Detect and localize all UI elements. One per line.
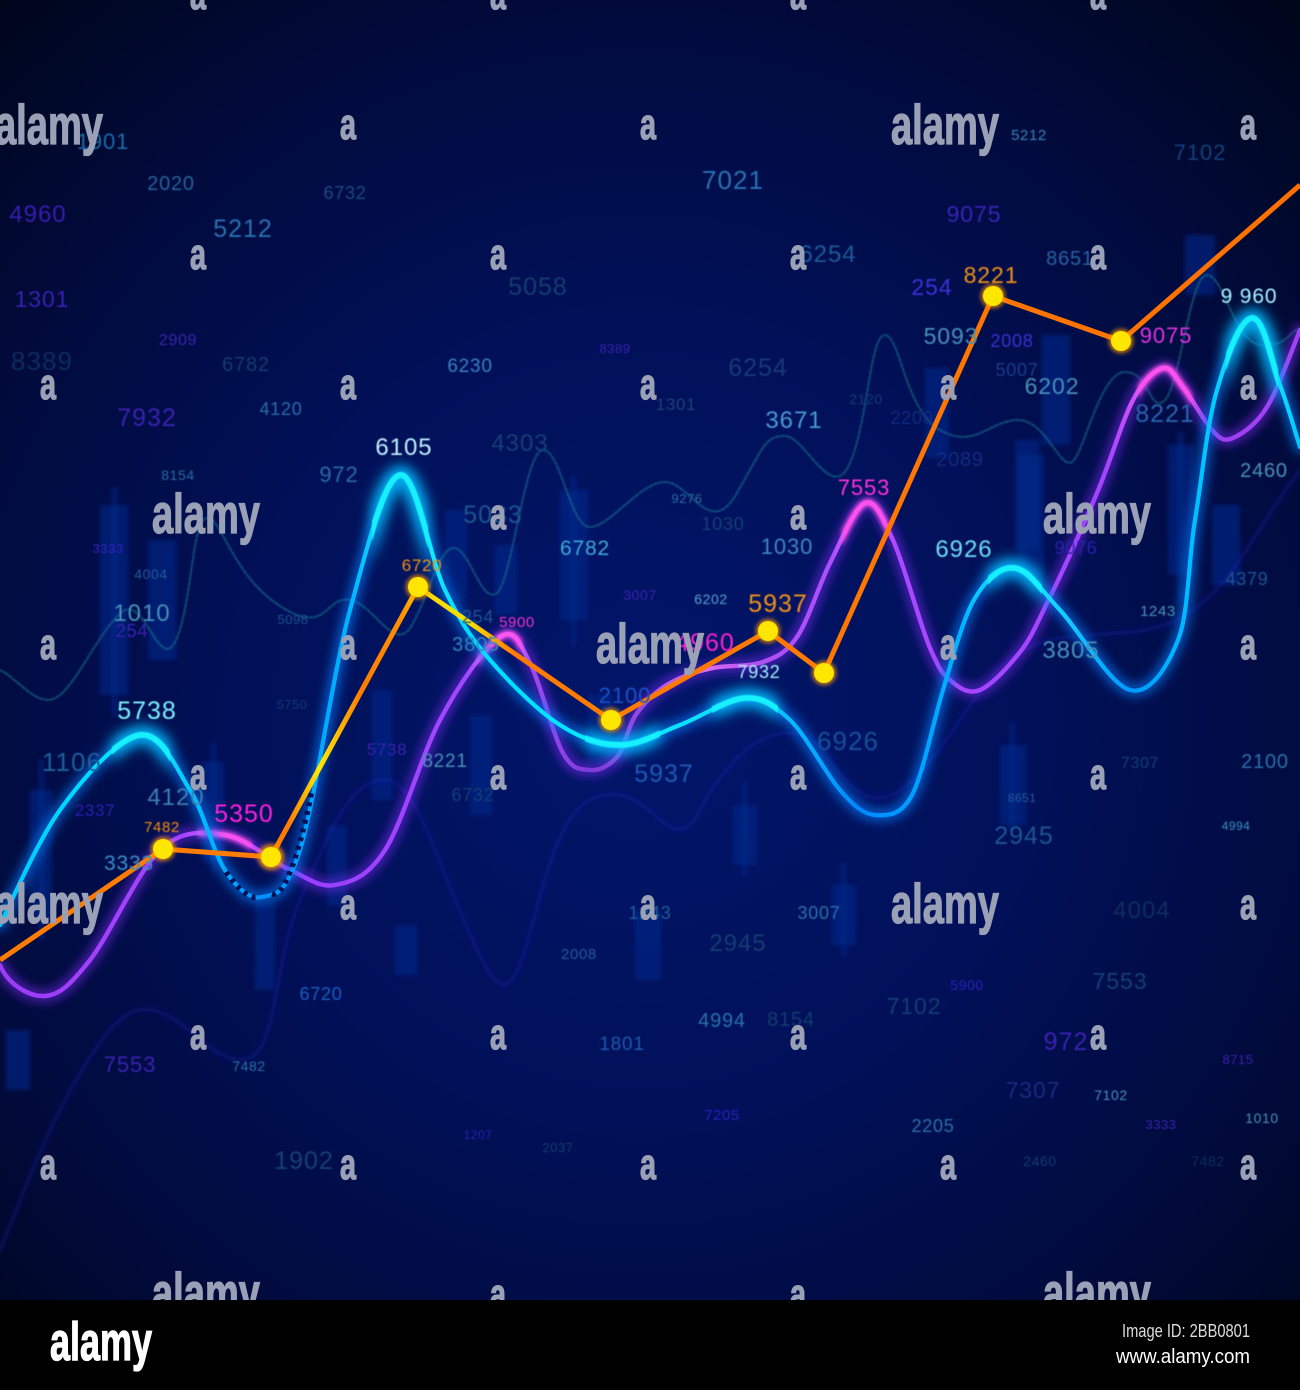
watermark: alamy logos and letters: a (1090, 230, 1106, 279)
image id: Image ID: 2BB0801 (1122, 1321, 1250, 1341)
watermark: alamy logos and letters: a (1090, 750, 1106, 799)
watermark: alamy logos and letters: a (640, 360, 656, 409)
watermark: alamy logos and letters: a (940, 620, 956, 669)
data number labels: 7553 (838, 475, 890, 500)
watermark: alamy logos and letters: a (490, 1270, 506, 1319)
data number labels: 2200 (891, 408, 933, 428)
data number labels: 7307 (1121, 755, 1159, 772)
watermark: alamy logos and letters: a (40, 620, 56, 669)
data number labels: 8389 (11, 346, 73, 376)
data number labels: 7102 (887, 993, 941, 1019)
data number labels: 2100 (599, 683, 651, 708)
data number labels: 6105 (375, 434, 433, 461)
data number labels: 2909 (159, 332, 197, 349)
data number labels: 6926 (817, 726, 879, 756)
watermark: alamy logos and letters: alamy (891, 93, 999, 156)
data number labels: 3333 (104, 852, 154, 875)
data number labels: 2945 (709, 930, 767, 957)
data number labels: 9 960 (1221, 285, 1277, 308)
data number labels: 6732 (324, 183, 366, 203)
data number labels: 7482 (1191, 1153, 1225, 1169)
watermark: alamy logos and letters: a (640, 1140, 656, 1189)
data number labels: 3671 (765, 407, 823, 434)
data number labels: 9076 (1055, 538, 1097, 558)
chart line: cyan curve (0, 318, 1300, 925)
data number labels: 5900 (950, 977, 984, 993)
data number labels: 2100 (1241, 751, 1289, 773)
data number labels: 4960 (675, 629, 735, 657)
data number labels: 5033 (463, 501, 523, 529)
faint teal dotted line (0, 275, 1300, 700)
data number labels: 7482 (144, 819, 180, 836)
data number labels: 6720 (300, 984, 342, 1004)
watermark: alamy logos and letters: a (490, 750, 506, 799)
data number labels: 1010 (113, 600, 171, 627)
data number labels: 8715 (1222, 1052, 1254, 1067)
data number labels: 1207 (464, 1128, 492, 1142)
watermark: alamy logos and letters: a (1240, 1140, 1256, 1189)
data number labels: 7553 (104, 1052, 156, 1077)
data number labels: 9276 (672, 491, 702, 506)
data number labels: 7205 (704, 1107, 740, 1124)
data number labels: 1243 (629, 903, 671, 923)
data number labels: 6782 (222, 354, 270, 376)
data number labels: 3805 (1042, 637, 1100, 664)
data number labels: 5350 (214, 800, 274, 828)
watermark: alamy logos and letters: a (790, 230, 806, 279)
watermark: alamy logos and letters: a (490, 490, 506, 539)
data number labels: 3007 (798, 903, 840, 923)
data number labels: 9075 (1140, 323, 1192, 348)
data number labels: 4004 (134, 566, 168, 582)
data number labels: 4120 (260, 399, 302, 419)
data number labels: 972 (319, 462, 359, 487)
data number labels: 254 (116, 621, 148, 641)
watermark: alamy logos and letters: a (340, 620, 356, 669)
data number labels: 3333 (92, 541, 124, 556)
watermark: alamy logos and letters: a (340, 880, 356, 929)
data number labels: 6202 (1025, 373, 1079, 399)
data number labels: 2020 (147, 173, 195, 195)
data number labels: 254 (462, 607, 494, 627)
watermark: alamy logos and letters: a (640, 880, 656, 929)
data number labels: 5212 (1011, 127, 1047, 144)
data number labels (9, 127, 1289, 1175)
data number labels: 5058 (508, 273, 568, 301)
data number labels: 7932 (117, 404, 177, 432)
data number labels: 8651 (1008, 791, 1036, 805)
data number labels: 5738 (117, 697, 177, 725)
watermark: alamy logos and letters: a (790, 490, 806, 539)
data number labels: 4960 (9, 201, 67, 228)
data number labels: 5212 (213, 215, 273, 243)
watermark: alamy logos and letters: a (940, 1140, 956, 1189)
data number labels: 6202 (694, 591, 728, 607)
data number labels: 2037 (542, 1140, 574, 1155)
data number labels: 2120 (849, 391, 883, 407)
data number labels: 7553 (1093, 968, 1147, 994)
watermark: alamy logos and letters: alamy (1043, 1261, 1151, 1324)
data number labels: 7021 (702, 165, 764, 195)
chart line: orange polyline with points (0, 185, 1300, 960)
data number labels: 1030 (761, 534, 813, 559)
website: www.alamy.com (1115, 1346, 1250, 1368)
watermark: alamy logos and letters: alamy (596, 612, 704, 675)
watermark: alamy logos and letters: alamy (1043, 482, 1151, 545)
watermark: alamy logos and letters: a (790, 1270, 806, 1319)
watermark: alamy logos and letters: a (1090, 1010, 1106, 1059)
footer bar (0, 1300, 1300, 1390)
watermark: alamy logos and letters: a (190, 1010, 206, 1059)
watermark: alamy logos and letters: a (640, 100, 656, 149)
footer logo: alamy (50, 1312, 152, 1372)
watermark: alamy logos and letters: alamy (152, 482, 260, 545)
watermark: alamy logos and letters: a (490, 1010, 506, 1059)
watermark: alamy logos and letters: a (40, 1140, 56, 1189)
data number labels: 4004 (1113, 897, 1171, 924)
data number labels: 6926 (935, 536, 993, 563)
data number labels: 1901 (77, 129, 129, 154)
data number labels: 5007 (996, 360, 1038, 380)
data number labels: 2089 (936, 449, 984, 471)
data number labels: 972 (1044, 1028, 1088, 1056)
data number labels: 2205 (912, 1116, 954, 1136)
data number labels: 2945 (994, 822, 1054, 850)
watermark: alamy logos and letters: a (190, 750, 206, 799)
data number labels: 4303 (491, 430, 549, 457)
data number labels: 9075 (947, 201, 1001, 227)
data number labels: 7482 (232, 1058, 266, 1074)
data number labels: 1301 (656, 395, 696, 414)
watermark: alamy logos and letters: a (790, 1010, 806, 1059)
watermark: alamy logos and letters: alamy (152, 1261, 260, 1324)
data number labels: 4379 (1226, 569, 1268, 589)
data number labels: 1106 (42, 747, 102, 777)
data number labels: 1902 (274, 1147, 334, 1175)
data number labels: 1801 (599, 1034, 645, 1055)
data number labels: 2337 (75, 801, 115, 820)
watermark: alamy logos and letters: alamy (891, 872, 999, 935)
data number labels: 5093 (924, 323, 978, 349)
data number labels: 6720 (402, 556, 442, 575)
data number labels: 3805 (452, 634, 500, 656)
data number labels: 3333 (1146, 1117, 1176, 1132)
data number labels: 1030 (702, 514, 744, 534)
watermark: alamy logos and letters: a (940, 360, 956, 409)
data number labels: 7102 (1174, 140, 1226, 165)
chart line: purple curve (0, 330, 1300, 996)
watermark: alamy logos and letters: a (190, 230, 206, 279)
data number labels: 3007 (623, 587, 657, 603)
data number labels: 8221 (422, 751, 468, 772)
data number labels: 2460 (1240, 460, 1288, 482)
watermark: alamy logos and letters: a (490, 230, 506, 279)
data number labels: 1301 (15, 286, 69, 312)
watermark: alamy logos and letters: a (1240, 620, 1256, 669)
watermark: alamy logos and letters: a (40, 360, 56, 409)
data number labels: 5750 (276, 697, 308, 712)
watermark: alamy logos and letters: a (1240, 360, 1256, 409)
data number labels: 6254 (728, 354, 788, 382)
data number labels: 8221 (1135, 400, 1195, 428)
data number labels: 4994 (698, 1010, 746, 1032)
data number labels: 6782 (560, 537, 610, 560)
data number labels: 4120 (147, 784, 205, 811)
data number labels: 8221 (964, 262, 1018, 288)
data number labels: 8154 (161, 467, 195, 483)
data number labels: 4994 (1222, 819, 1250, 833)
data number labels: 254 (911, 274, 953, 300)
data number labels: 7102 (1094, 1087, 1128, 1103)
data number labels: 5738 (367, 740, 407, 759)
watermark: alamy logos and letters: a (1240, 880, 1256, 929)
data number labels: 2008 (561, 946, 597, 963)
watermark: alamy logos and letters: a (340, 360, 356, 409)
data number labels: 5900 (499, 614, 535, 631)
watermark: alamy logos and letters: a (1240, 100, 1256, 149)
data number labels: 7307 (1006, 1077, 1060, 1103)
data number labels: 8651 (1046, 248, 1094, 270)
data number labels: 8154 (767, 1009, 815, 1031)
data number labels: 6230 (447, 356, 493, 377)
watermark: alamy logos and letters: a (340, 1140, 356, 1189)
data number labels: 1243 (1140, 603, 1176, 620)
faint indigo trend line (0, 470, 1300, 1250)
data number labels: 6732 (452, 785, 494, 805)
data number labels: 5937 (748, 590, 808, 618)
watermark: alamy logos and letters: a (790, 750, 806, 799)
data number labels: 5098 (278, 612, 308, 627)
data number labels: 5937 (634, 760, 694, 788)
data number labels: 7932 (738, 662, 780, 682)
data number labels: 8389 (600, 341, 630, 356)
data number labels: 6254 (799, 241, 857, 268)
data number labels: 2008 (991, 331, 1033, 351)
watermark: alamy logos and letters: a (340, 100, 356, 149)
data number labels: 1010 (1245, 1110, 1279, 1126)
data number labels: 2460 (1023, 1153, 1057, 1169)
background candlesticks (6, 235, 1240, 1090)
